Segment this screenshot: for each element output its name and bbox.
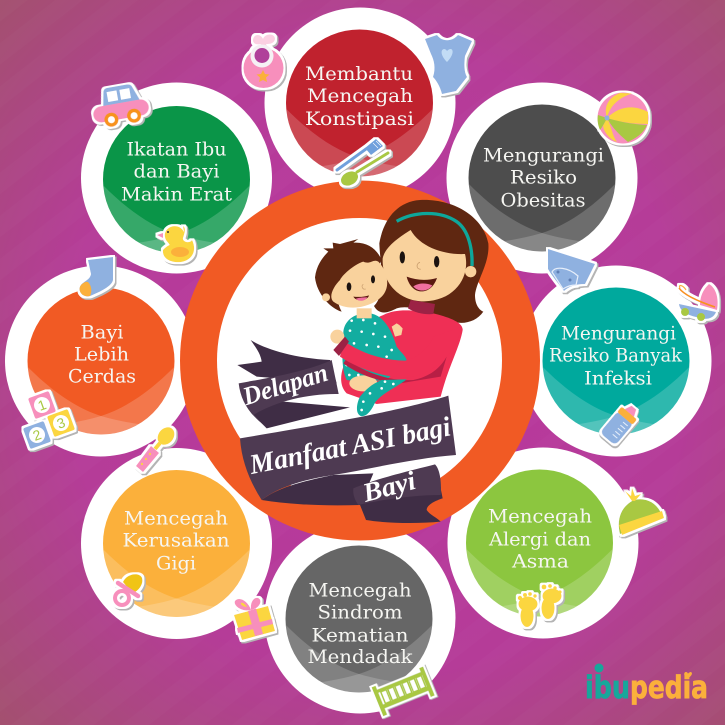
icon: toy car xyxy=(89,81,151,130)
icon: baby bib xyxy=(244,34,284,88)
ribbon banner: Delapan xyxy=(239,360,339,426)
logo: ibupedia: pedia xyxy=(630,670,708,706)
panel: Ikatan Ibu dan Bayi Makin Erat: Ikatan Ibu xyxy=(126,138,226,160)
panel: Mengurangi Resiko Obesitas xyxy=(446,82,638,274)
mother eyes and nose xyxy=(400,251,439,269)
icon: milk bottle xyxy=(600,401,642,446)
icon: baby hat xyxy=(619,488,664,535)
icon: baby spoon xyxy=(136,424,178,472)
logo: ibupedia: ibu xyxy=(585,670,630,706)
icon: diaper xyxy=(548,249,595,291)
panel: Membantu Mencegah Konstipasi: Membantu xyxy=(305,63,413,85)
ribbon banner: Manfaat ASI bagi xyxy=(240,396,456,500)
icon: baby crib xyxy=(372,667,435,716)
panel: Ikatan Ibu dan Bayi Makin Erat: dan Bayi xyxy=(134,160,220,182)
baby face xyxy=(331,261,387,308)
panel: Mengurangi Resiko Banyak Infeksi: Mengurangi xyxy=(561,322,676,344)
panel: Bayi Lebih Cerdas xyxy=(5,266,196,456)
icon: gift box xyxy=(234,598,275,640)
mother mouth xyxy=(407,277,437,291)
ribbon lower fold xyxy=(262,473,373,505)
baby torso xyxy=(342,313,407,382)
central orange ring xyxy=(180,180,540,540)
ribbon lower tail xyxy=(357,488,443,523)
mother headband xyxy=(397,213,472,266)
logo: ibupedia xyxy=(585,664,708,706)
baby ear xyxy=(322,293,330,301)
panel: Mencegah Kerusakan Gigi: Gigi xyxy=(156,552,196,574)
panel: Mencegah Sindrom Kematian Mendadak: Mendadak xyxy=(308,646,413,668)
baby leg over ribbon xyxy=(357,379,407,416)
panel: Mencegah Alergi dan Asma: Alergi dan xyxy=(488,528,591,550)
panel: Membantu Mencegah Konstipasi: Konstipasi xyxy=(305,108,414,130)
ribbon title: Bayi: Bayi xyxy=(358,465,419,508)
panel: Mengurangi Resiko Obesitas: Obesitas xyxy=(500,190,586,212)
panel: Mencegah Sindrom Kematian Mendadak: Mencegah xyxy=(308,580,412,602)
icon: alphabet number blocks xyxy=(23,391,75,449)
ribbon top tail xyxy=(237,340,337,383)
mother turtleneck xyxy=(408,300,435,314)
ribbon title: Manfaat ASI bagi: Manfaat ASI bagi xyxy=(246,411,453,481)
icon: baby onesie xyxy=(425,35,472,94)
panel: Membantu Mencegah Konstipasi xyxy=(264,8,456,198)
icon: rubber duck xyxy=(157,226,194,262)
mother sweater xyxy=(341,310,463,404)
icon: pacifier xyxy=(115,574,142,605)
illustration: mother and baby with ribbon xyxy=(237,200,488,523)
mother face xyxy=(383,230,466,301)
panel: Mencegah Sindrom Kematian Mendadak xyxy=(264,522,456,714)
panel: Mengurangi Resiko Banyak Infeksi: Infeksi xyxy=(584,368,652,390)
icon: baby sock xyxy=(80,257,113,296)
mother ear xyxy=(465,266,476,277)
panel: Bayi Lebih Cerdas: Cerdas xyxy=(68,366,136,388)
icon: fork and spoon xyxy=(337,139,388,188)
icon: baby stroller xyxy=(679,284,718,321)
ribbon title: Delapan: Delapan xyxy=(238,358,331,411)
icon: alphabet number blocks: 2 xyxy=(31,426,44,444)
panel: Mencegah Kerusakan Gigi: Mencegah xyxy=(124,508,228,530)
baby pajama dots xyxy=(345,319,393,376)
panel: Mencegah Alergi dan Asma xyxy=(448,448,638,638)
baby hair xyxy=(315,239,382,312)
panel: Mengurangi Resiko Banyak Infeksi xyxy=(520,266,712,456)
ribbon xyxy=(237,340,456,523)
icon: alphabet number blocks: 3 xyxy=(55,414,68,432)
icon: beach ball xyxy=(598,92,648,144)
panel: Mencegah Alergi dan Asma: Mencegah xyxy=(488,506,592,528)
panel: Mencegah Kerusakan Gigi: Kerusakan xyxy=(122,530,230,552)
panel: Bayi Lebih Cerdas: Bayi xyxy=(80,322,124,344)
icon: baby feet xyxy=(518,584,562,627)
ribbon banner: Bayi xyxy=(353,464,441,505)
panel: Ikatan Ibu dan Bayi Makin Erat: Makin Erat xyxy=(121,184,232,206)
panel: Ikatan Ibu dan Bayi Makin Erat xyxy=(81,82,272,274)
panel: Mengurangi Resiko Banyak Infeksi: Resiko Banyak xyxy=(549,344,682,366)
panel: Mengurangi Resiko Obesitas: Resiko xyxy=(510,166,577,188)
mother arm xyxy=(333,327,462,383)
icon: alphabet number blocks: 1 xyxy=(36,396,49,414)
panel: Membantu Mencegah Konstipasi: Mencegah xyxy=(307,85,413,107)
baby eyes and mouth xyxy=(347,275,375,301)
mother back hair xyxy=(374,200,488,323)
ribbon fold xyxy=(253,402,350,428)
panel: Mencegah Kerusakan Gigi xyxy=(81,448,272,639)
panel: Mencegah Sindrom Kematian Mendadak: Kematian xyxy=(312,624,408,646)
panel: Mencegah Alergi dan Asma: Asma xyxy=(511,550,569,572)
panel: Bayi Lebih Cerdas: Lebih xyxy=(74,344,129,366)
panel: Mencegah Sindrom Kematian Mendadak: Sindrom xyxy=(318,602,402,624)
panel: Mengurangi Resiko Obesitas: Mengurangi xyxy=(483,144,604,166)
baby hand and shoulder xyxy=(330,308,403,391)
